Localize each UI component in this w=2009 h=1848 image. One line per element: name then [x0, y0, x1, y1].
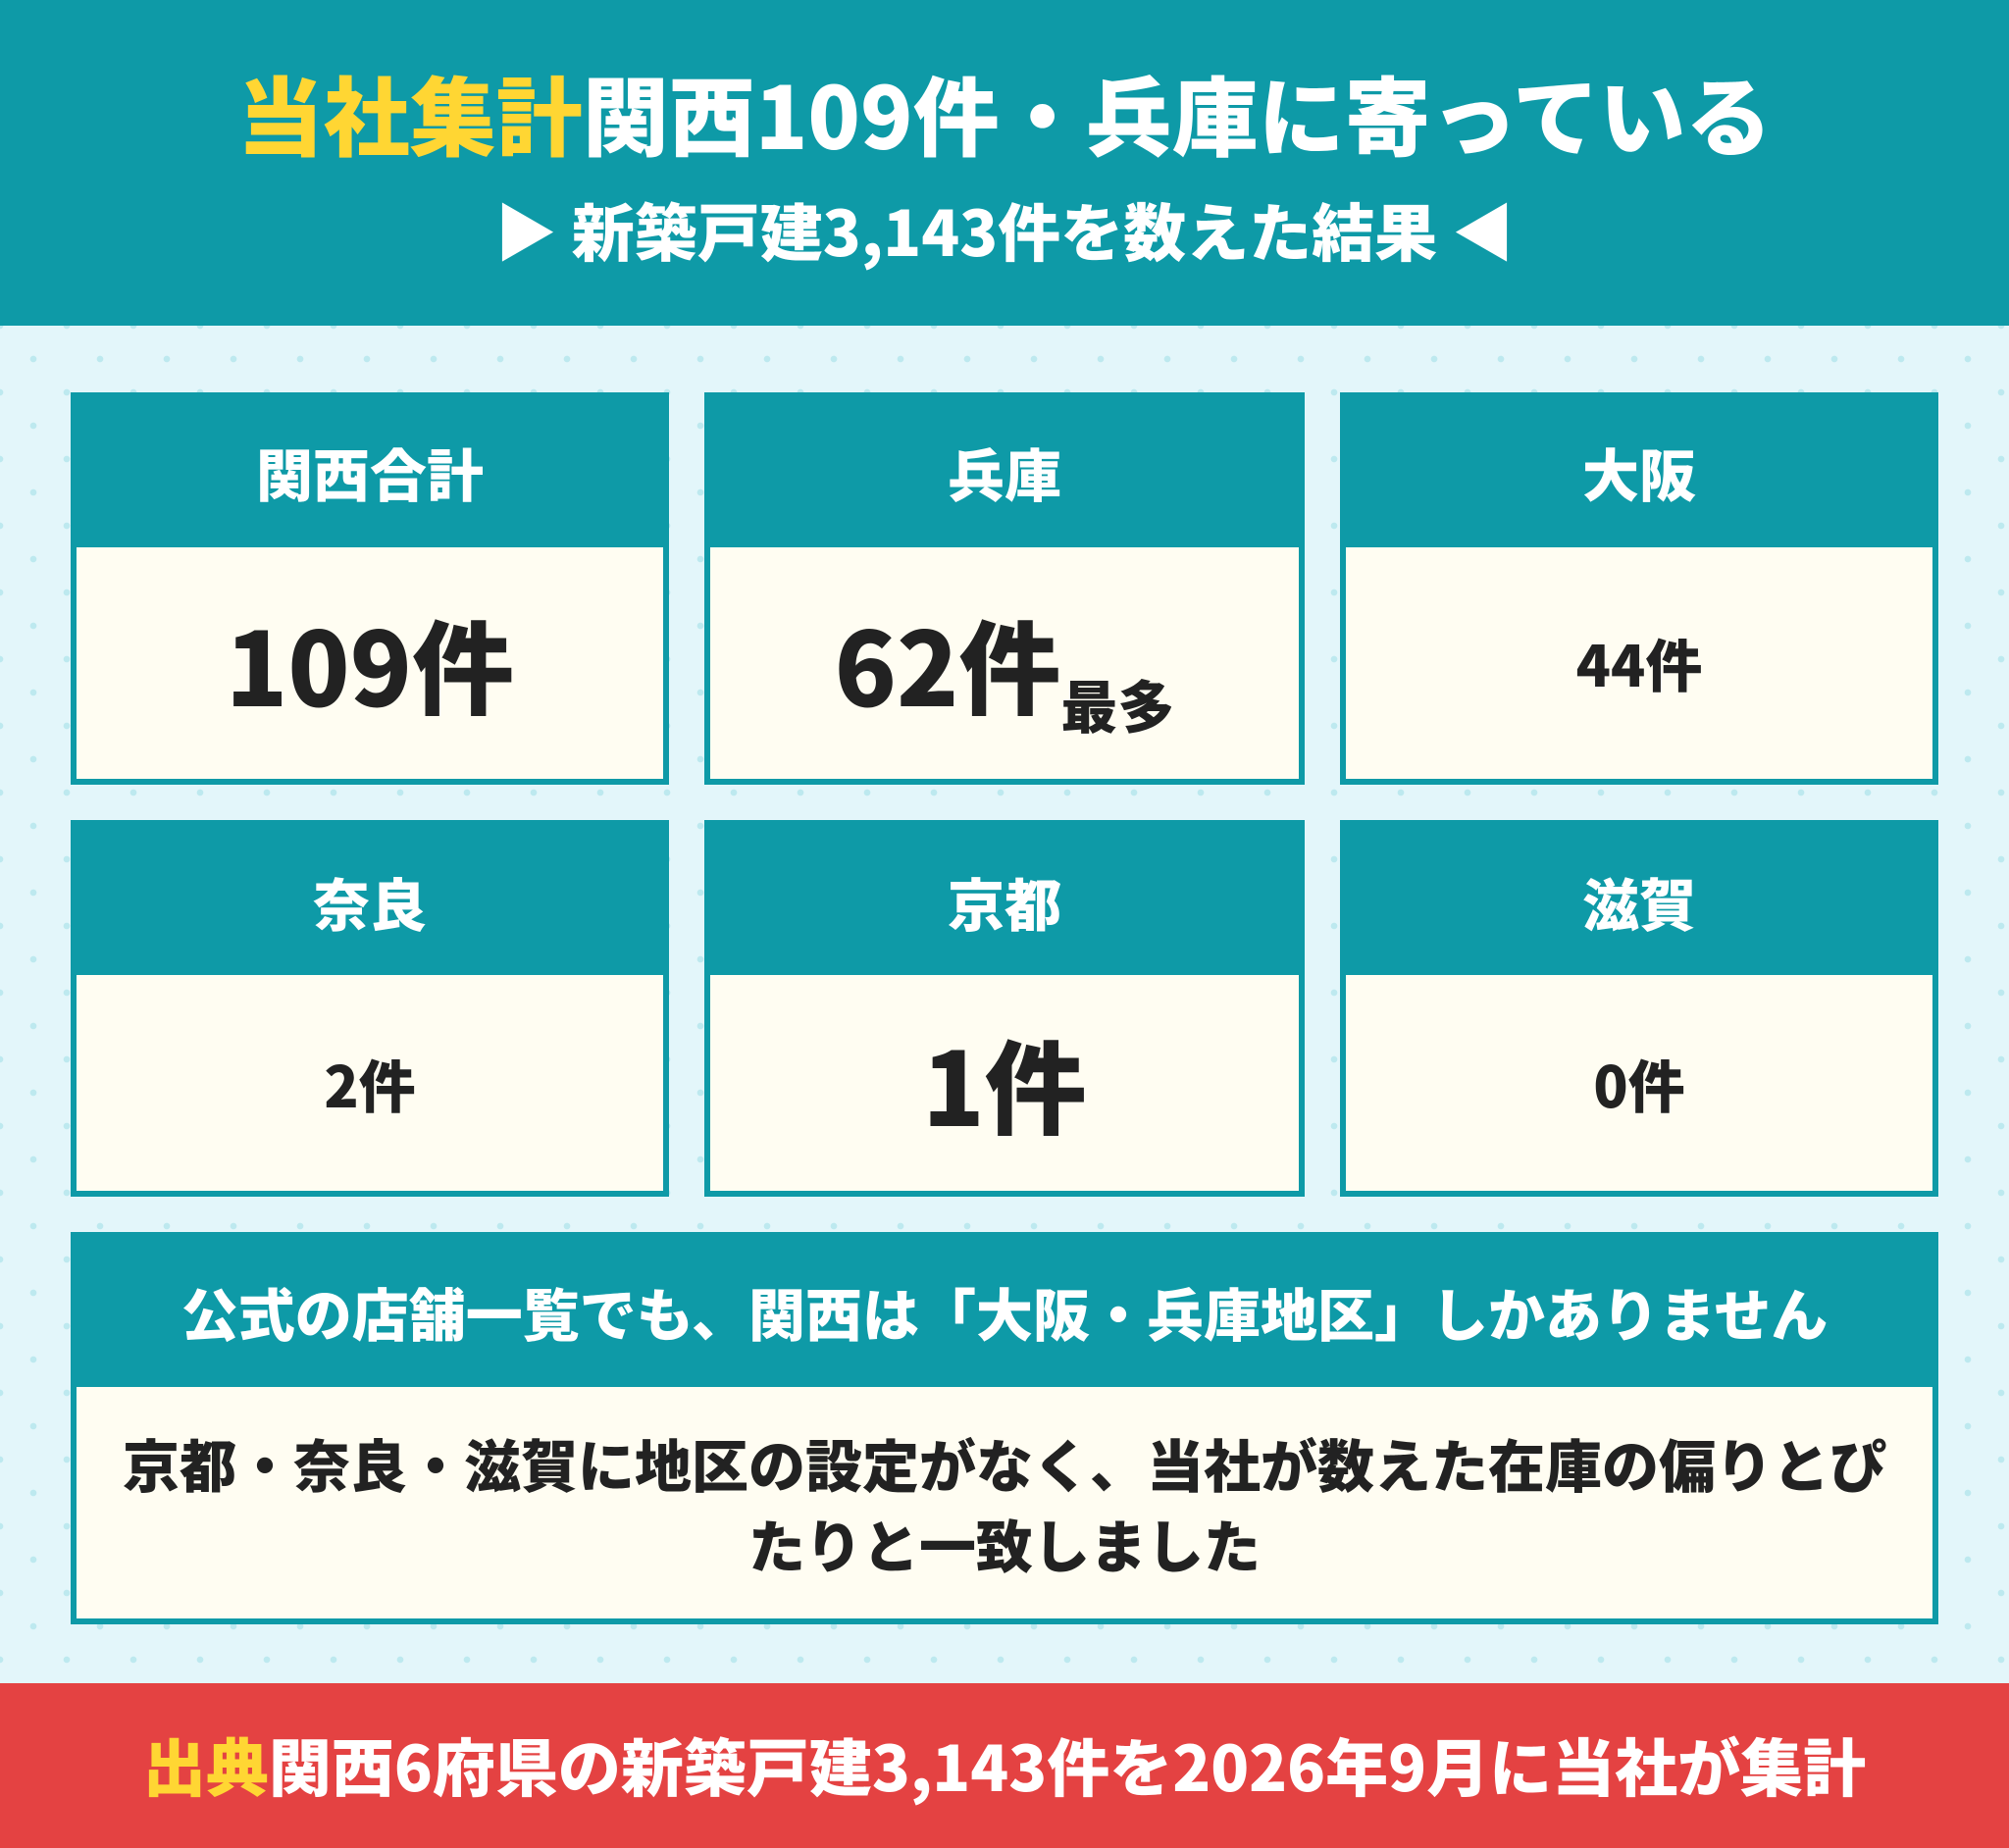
card: Osaka: [1340, 392, 1938, 785]
footer source note: 出典関西6府県の新築戸建3,143件を2026年9月に当社が集計: [143, 1720, 1866, 1810]
card heading: [1340, 392, 1938, 547]
subtitle: ▶ 新築戸建3,143件を数えた結果 ◀: [494, 184, 1515, 275]
card value: 2件: [324, 1042, 416, 1124]
card heading: 京都: [948, 860, 1061, 943]
card heading: 滋賀: [1582, 860, 1696, 943]
card heading: [704, 820, 1305, 975]
card: Kansai total: [71, 392, 669, 785]
footer source note: [0, 1683, 2009, 1848]
card: Shiga: [1340, 820, 1938, 1197]
card: Kyoto: [704, 820, 1305, 1197]
card: Nara: [71, 820, 669, 1197]
card value: 0件: [1593, 1042, 1685, 1124]
card heading: [71, 392, 669, 547]
title: 当社集計関西109件・兵庫に寄っている: [237, 50, 1772, 175]
panel body text: 京都・奈良・滋賀に地区の設定がなく、当社が数えた在庫の偏りとぴたりと一致しました: [123, 1421, 1886, 1584]
card value: 62件: [835, 588, 1060, 736]
card value: 最多: [1060, 662, 1174, 744]
panel heading: 公式の店舗一覧でも、関西は「大阪・兵庫地区」しかありません: [181, 1270, 1828, 1353]
panel: official store list note: [71, 1232, 1938, 1624]
header banner: [0, 0, 2009, 326]
card value: 1件: [922, 1007, 1087, 1155]
dotted background: [0, 326, 2009, 1683]
card heading: [1340, 820, 1938, 975]
card heading: 兵庫: [948, 431, 1061, 513]
card heading: 大阪: [1582, 431, 1696, 513]
card value: 44件: [1576, 621, 1702, 703]
card value: [835, 588, 1174, 744]
panel heading: [71, 1232, 1938, 1387]
card heading: 関西合計: [256, 431, 484, 513]
card: Hyogo: [704, 392, 1305, 785]
card value: 109件: [226, 588, 514, 736]
card heading: [71, 820, 669, 975]
card heading: 奈良: [313, 860, 427, 943]
card heading: [704, 392, 1305, 547]
